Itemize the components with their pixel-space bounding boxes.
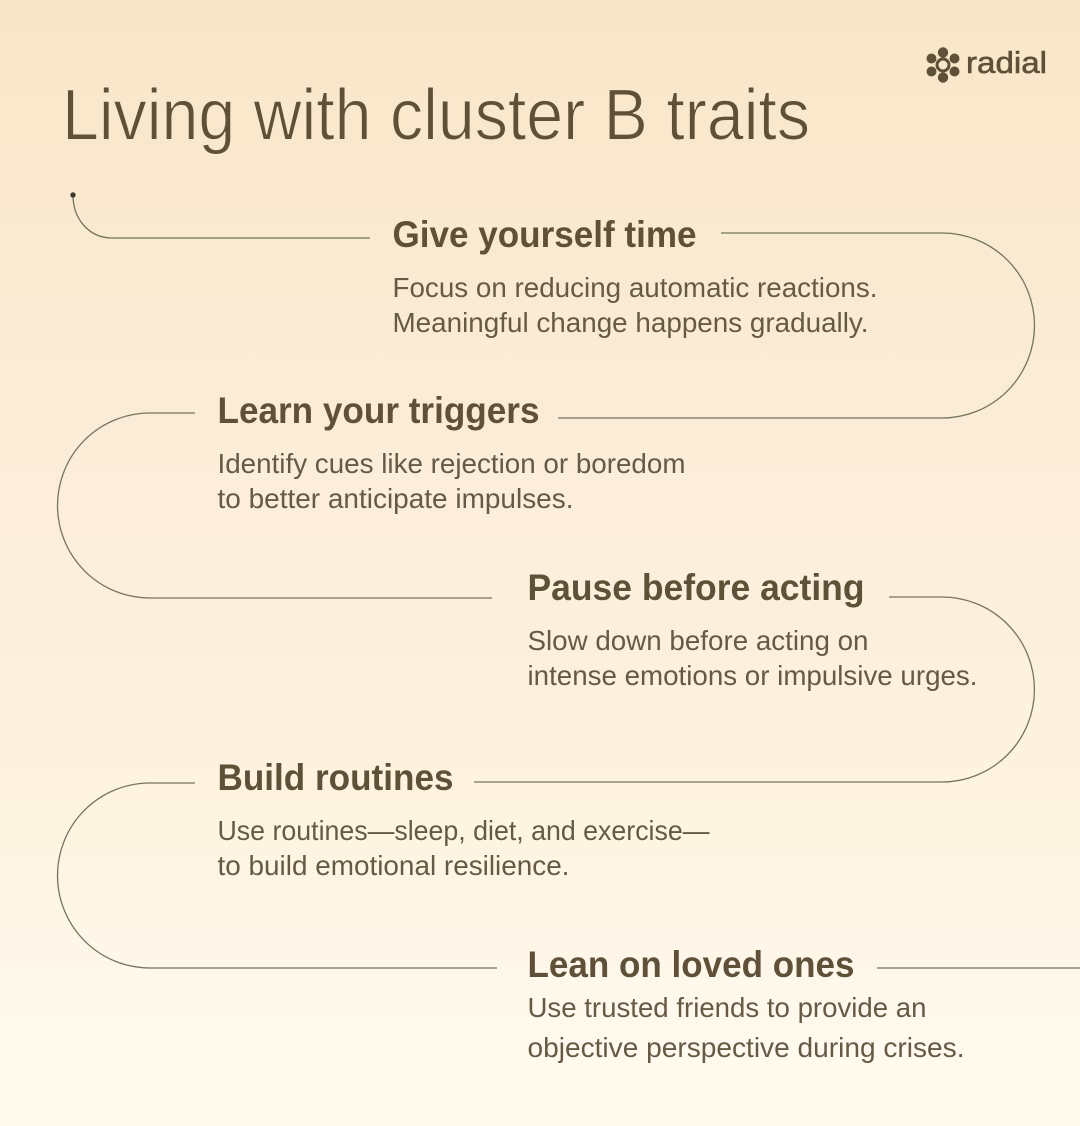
step 3: pause before acting [528,567,978,691]
heading: Lean on loved ones [528,944,854,985]
title: Living with cluster B traits [62,76,810,156]
logo: radial [926,45,1047,83]
step 5: lean on loved ones [528,944,964,1063]
body text: Use trusted friends to provide an [528,992,926,1023]
step 3: pause before acting: intense emotions or impulsive urges. [528,660,978,691]
start dot [70,192,76,198]
connector path [58,195,1080,968]
step 1: give yourself time [392,214,878,338]
heading: Learn your triggers [218,390,540,431]
heading: Give yourself time [392,214,696,255]
step 2: learn your triggers [218,390,686,514]
heading: Pause before acting [528,567,864,608]
icon: flower [926,47,960,83]
body text: Identify cues like rejection or boredom [218,448,686,479]
wordmark: radial [966,45,1047,80]
body text: Slow down before acting on [528,625,868,656]
heading: Build routines [218,757,454,798]
step 4: build routines: to build emotional resilience. [218,850,570,881]
step 4: build routines [218,757,710,881]
step 2: learn your triggers: to better anticipate impulses. [218,483,574,514]
step 1: give yourself time: Meaningful change happens gradually. [392,307,868,338]
body text: Use routines—sleep, diet, and exercise— [218,815,710,846]
body text: Focus on reducing automatic reactions. [392,272,878,303]
step 5: lean on loved ones: objective perspective during crises. [528,1032,964,1063]
